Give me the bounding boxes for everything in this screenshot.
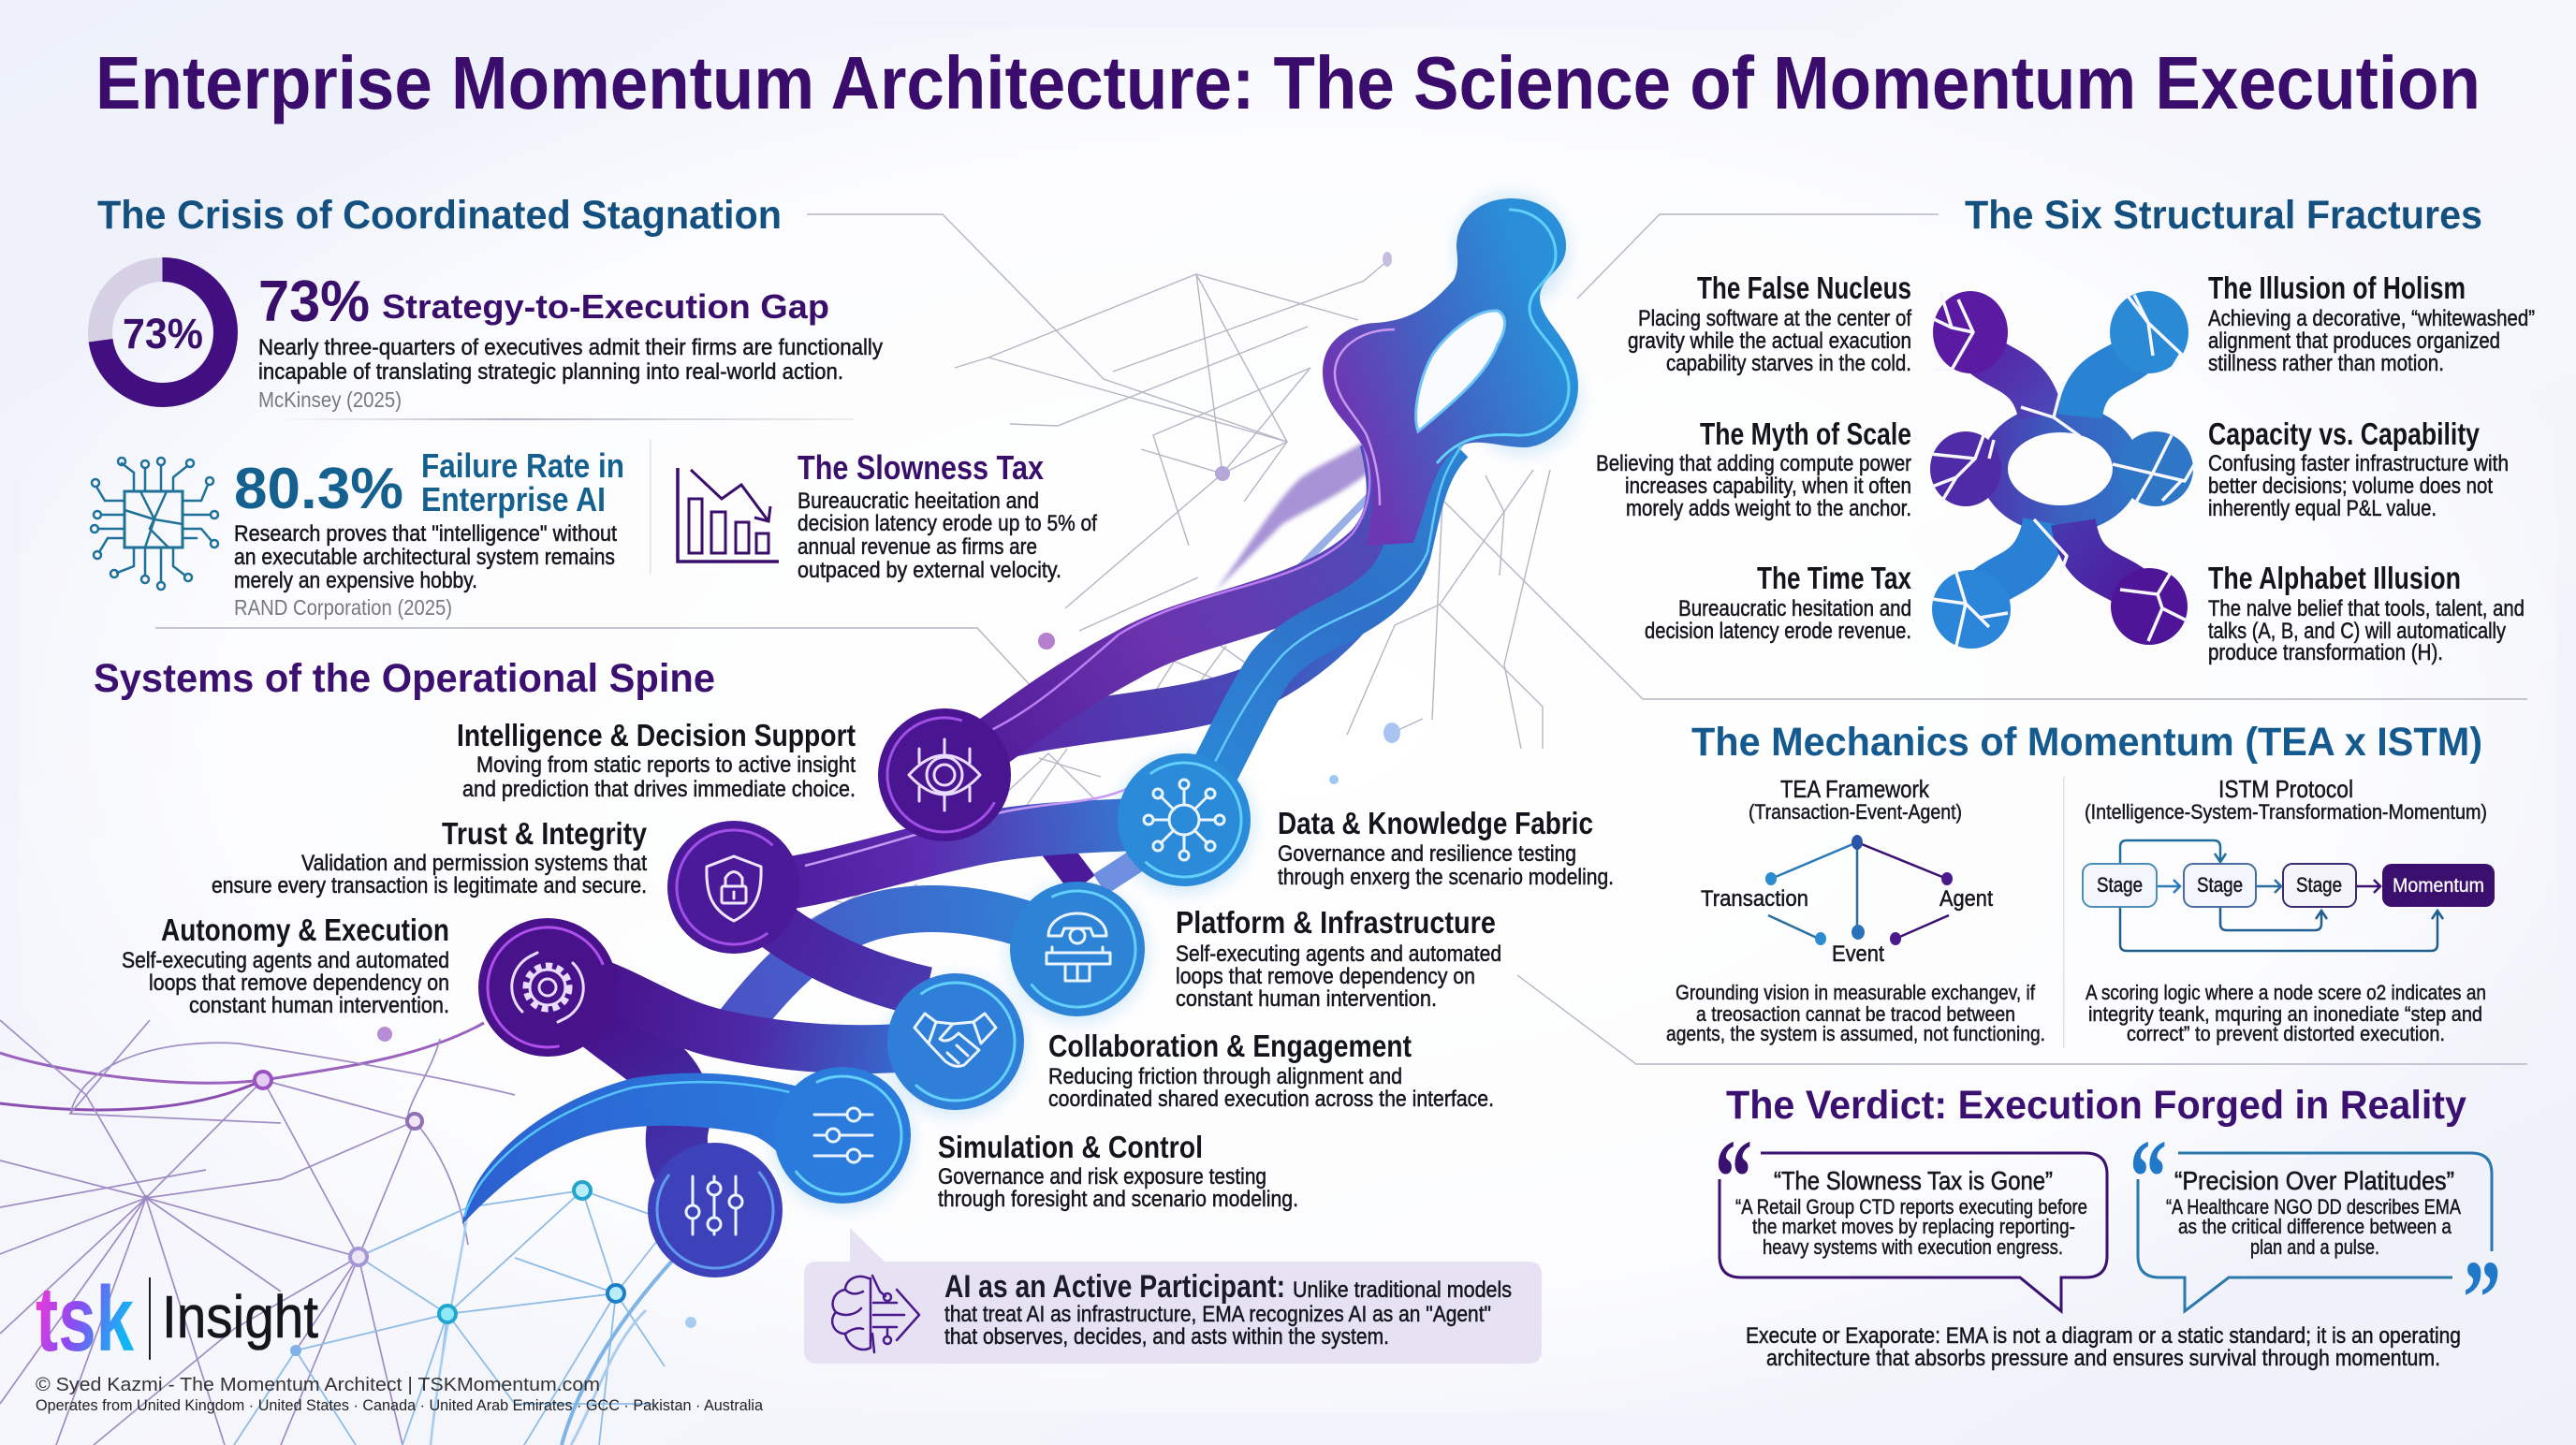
icon: cracked AI chip [91, 458, 218, 590]
fracture: capacity vs capability: better decisions; volume does not [2208, 474, 2493, 499]
label: platform [1176, 905, 1501, 1012]
heading: Systems of the Operational Spine [94, 656, 715, 701]
fracture: capacity vs capability: inherently equal P&L value. [2208, 496, 2437, 521]
label: collaboration: Reducing friction through alignment and [1048, 1064, 1402, 1089]
donut chart 73%: 73% [123, 310, 203, 358]
quote card: precision over platitudes [2130, 1117, 2501, 1357]
node: data [1105, 740, 1264, 899]
TEA triangle diagram: Event [1832, 941, 1884, 967]
icon: handshake [915, 1014, 996, 1066]
stat: 73% strategy gap: incapable of translating strategic planning into real-world action. [258, 359, 843, 385]
callout: AI as an active participant [804, 1228, 1542, 1364]
label: platform: Platform & Infrastructure [1176, 905, 1496, 940]
stat: 80.3% failure rate: an executable architectural system remains [234, 545, 615, 570]
ISTM flow diagram: Momentum [2393, 875, 2484, 897]
stat: 80.3% failure rate [234, 446, 624, 620]
fracture: myth of scale: Believing that adding compute power [1596, 451, 1911, 476]
heading: The Verdict: Execution Forged in Reality [1726, 1083, 2466, 1128]
label: trust: Validation and permission systems that [301, 851, 647, 876]
fracture: myth of scale: increases capability, when it often [1625, 474, 1911, 499]
slowness tax text [798, 448, 1097, 583]
TEA description: agents, the system is assumed, not functioning. [1666, 1022, 2045, 1045]
node: platform [1000, 871, 1155, 1027]
panel: six structural fractures [1596, 193, 2535, 665]
logo and credits: tsk [36, 1267, 134, 1370]
TEA triangle diagram: Agent [1939, 886, 1993, 912]
node: autonomy [477, 917, 618, 1058]
logo and credits: Operates from United Kingdom · United States · Canada · United Arab Emirates · GCC · Pakistan · Australia [36, 1397, 764, 1414]
ISTM flow diagram [2083, 840, 2495, 951]
strand: eye under platform [1030, 814, 1083, 884]
ISTM description: A scoring logic where a node scere o2 indicates an [2086, 981, 2486, 1004]
icon: gear [512, 953, 583, 1022]
slowness tax text: The Slowness Tax [798, 448, 1044, 487]
band: simulation [462, 1073, 806, 1224]
TEA description: a treosaction cannat be tracod between [1696, 1002, 2015, 1026]
donut chart 73% [100, 270, 226, 395]
label: platform: loops that remove dependency on [1176, 964, 1475, 989]
ISTM description [2086, 981, 2486, 1045]
callout text: that observes, decides, and asts within the system. [944, 1324, 1389, 1350]
label: autonomy: Autonomy & Execution [161, 912, 449, 947]
ISTM protocol title: ISTM Protocol [2218, 775, 2353, 803]
slowness tax text: decision latency erode up to 5% of [798, 511, 1097, 536]
label: autonomy: constant human intervention. [189, 993, 449, 1018]
closing statement: architecture that absorbs pressure and ensures survival through momentum. [1766, 1346, 2440, 1371]
fracture: false nucleus: The False Nucleus [1697, 270, 1911, 305]
heading: The Six Structural Fractures [1965, 193, 2482, 238]
strand: platform up [1100, 854, 1148, 884]
central spine [462, 195, 1579, 1292]
stat: 80.3% failure rate: Enterprise AI [421, 480, 606, 518]
label: trust: Trust & Integrity [442, 816, 648, 851]
band: trust to collaboration [734, 887, 927, 992]
stat: 73% strategy gap: Strategy-to-Execution Gap [382, 287, 829, 326]
stat: 80.3% failure rate: Research proves that "intelligence" without [234, 521, 617, 547]
TEA description [1666, 981, 2045, 1045]
fracture: illusion of holism [2208, 270, 2535, 376]
heading: The Crisis of Coordinated Stagnation [97, 193, 782, 238]
icon: data fabric [1144, 780, 1224, 860]
fracture: alphabet illusion: The nalve belief that tools, talent, and [2208, 596, 2525, 621]
node: vertical sliders [634, 1129, 797, 1292]
label: intelligence: Moving from static reports to active insight [476, 752, 856, 778]
fracture: capacity vs capability [2208, 416, 2509, 521]
TEA triangle diagram: Transaction [1701, 886, 1808, 912]
fracture: alphabet illusion: talks (A, B, and C) will automatically [2208, 619, 2506, 644]
icon: shield [707, 856, 761, 921]
stat: 80.3% failure rate: 80.3% [234, 457, 403, 521]
fracture: myth of scale: morely adds weight to the anchor. [1626, 496, 1911, 521]
strand highlight cyan [1208, 442, 1465, 777]
slowness tax text: outpaced by external velocity. [798, 558, 1061, 583]
decorative dots [377, 252, 1400, 1328]
fracture: alphabet illusion: produce transformation (H). [2208, 640, 2443, 665]
label: platform: Self-executing agents and automated [1176, 941, 1501, 967]
TEA description: Grounding vision in measurable exchangev, if [1676, 981, 2036, 1004]
fracture: time tax: The Time Tax [1757, 561, 1912, 595]
fracture: time tax: Bureaucratic hesitation and [1678, 596, 1911, 621]
fracture: false nucleus: gravity while the actual exacution [1628, 328, 1911, 354]
logo and credits [36, 1267, 764, 1414]
label: data: through enxerg the scenario modeling. [1278, 865, 1614, 890]
slowness tax text: Bureaucratic heeitation and [798, 489, 1039, 514]
quote card: precision over platitudes: “Precision Over Platitudes” [2174, 1166, 2454, 1195]
quote card: slowness tax: heavy systems with execution engress. [1763, 1235, 2063, 1259]
head: merged lobes [1323, 198, 1578, 546]
fracture: capacity vs capability: Capacity vs. Capability [2208, 416, 2481, 451]
panel: crisis of coordinated stagnation [91, 193, 1097, 620]
quote card: precision over platitudes: plan and a pulse. [2250, 1235, 2379, 1259]
panel: systems of the operational spine [94, 656, 1614, 1212]
label: collaboration: coordinated shared execution across the interface. [1048, 1087, 1494, 1112]
fracture diagram [1930, 291, 2195, 649]
TEA framework title: TEA Framework [1780, 775, 1930, 803]
label: simulation [938, 1130, 1298, 1212]
node: simulation [764, 1057, 921, 1214]
stat: 73% strategy gap [258, 270, 883, 412]
quote card: precision over platitudes: “A Healthcare NGO DD describes EMA [2166, 1195, 2461, 1219]
logo and credits: Insight [162, 1283, 318, 1350]
stat: 80.3% failure rate: merely an expensive hobby. [234, 568, 477, 593]
fracture: alphabet illusion: The Alphabet Illusion [2208, 561, 2461, 595]
TEA framework title: (Transaction-Event-Agent) [1749, 800, 1962, 824]
icon: declining chart [678, 468, 779, 562]
callout text: Unlike traditional models [1293, 1277, 1512, 1303]
ISTM flow diagram: Stage [2296, 873, 2342, 897]
label: autonomy [122, 912, 449, 1018]
strand: data to head [1184, 440, 1451, 820]
fracture: illusion of holism: alignment that produces organized [2208, 328, 2500, 354]
ISTM flow diagram: Stage [2197, 873, 2243, 897]
fracture: illusion of holism: stillness rather than motion. [2208, 351, 2444, 376]
label: autonomy: loops that remove dependency on [149, 971, 449, 996]
label: collaboration [1048, 1029, 1494, 1112]
icon: horizontal sliders [814, 1108, 872, 1162]
fracture: time tax: decision latency erode revenue. [1645, 619, 1911, 644]
label: trust: ensure every transaction is legitimate and secure. [212, 873, 647, 898]
TEA triangle diagram [1701, 835, 1993, 967]
label: intelligence: Intelligence & Decision Support [457, 718, 856, 752]
quote card: slowness tax: “The Slowness Tax is Gone” [1774, 1166, 2053, 1195]
quote card: slowness tax: the market moves by replacing reporting- [1752, 1215, 2075, 1238]
quote card: slowness tax [1715, 1117, 2107, 1311]
stat: 80.3% failure rate: RAND Corporation (2025) [234, 595, 452, 620]
glow under spine [773, 195, 1579, 1209]
fracture: false nucleus [1628, 270, 1911, 376]
strand: eye lower [964, 552, 1395, 749]
label: simulation: Governance and risk exposure testing [938, 1164, 1266, 1190]
callout text [944, 1269, 1512, 1350]
label: data: Data & Knowledge Fabric [1278, 806, 1593, 840]
strand: eye upper [944, 440, 1393, 775]
label: platform: constant human intervention. [1176, 986, 1437, 1012]
callout text: that treat AI as infrastructure, EMA recognizes AI as an "Agent" [944, 1302, 1491, 1327]
band: trust to data [734, 820, 1184, 887]
callout text: AI as an Active Participant: [944, 1269, 1285, 1305]
quote card: precision over platitudes: as the critical difference between a [2178, 1215, 2452, 1238]
logo and credits: © Syed Kazmi - The Momentum Architect | TSKMomentum.com [36, 1375, 600, 1395]
quote card: slowness tax: “ [1715, 1117, 1752, 1236]
closing statement [1746, 1323, 2461, 1371]
stat: 73% strategy gap: McKinsey (2025) [258, 387, 402, 412]
icon: vertical sliders [686, 1176, 742, 1234]
ISTM protocol title: (Intelligence-System-Transformation-Momentum) [2085, 800, 2487, 824]
connector lines and network behind the centre [155, 214, 2527, 1064]
icon: platform [1046, 913, 1110, 981]
icon: brain with arrow [832, 1276, 919, 1352]
label: simulation: Simulation & Control [938, 1130, 1203, 1164]
fracture: illusion of holism: The Illusion of Holism [2208, 270, 2466, 305]
fracture: false nucleus: capability starves in the cold. [1666, 351, 1911, 376]
quote card: slowness tax: “A Retail Group CTD reports executing before [1735, 1195, 2087, 1219]
label: collaboration: Collaboration & Engagement [1048, 1029, 1412, 1063]
ISTM flow diagram: Stage [2097, 873, 2143, 897]
label: intelligence: and prediction that drives immediate choice. [462, 777, 856, 802]
node: collaboration [873, 959, 1038, 1124]
label: simulation: through foresight and scenario modeling. [938, 1187, 1298, 1212]
band: platform [721, 909, 1077, 1048]
strand highlight purple [964, 440, 1369, 742]
TEA framework title [1749, 775, 1962, 824]
ISTM description: integrity teank, mquring an inonediate “step and [2088, 1002, 2482, 1026]
heading: The Mechanics of Momentum (TEA x ISTM) [1691, 720, 2482, 765]
band: autonomy to collaboration [548, 973, 956, 1049]
stat: 80.3% failure rate: Failure Rate in [421, 446, 624, 485]
node: eye [867, 697, 1022, 853]
label: intelligence [457, 718, 856, 802]
stat: 73% strategy gap: 73% [258, 270, 370, 334]
fracture: false nucleus: Placing software at the center of [1638, 306, 1911, 331]
label: data [1278, 806, 1614, 890]
quote card: precision over platitudes: ” [2463, 1238, 2501, 1357]
panel: the verdict [1715, 1083, 2501, 1371]
stat: 73% strategy gap: Nearly three-quarters of executives admit their firms are functionally [258, 335, 883, 360]
ISTM protocol title [2085, 775, 2487, 824]
label: data: Governance and resilience testing [1278, 841, 1576, 867]
closing statement: Execute or Exaporate: EMA is not a diagram or a static standard; it is an operating [1746, 1323, 2461, 1349]
label: trust [212, 816, 648, 898]
network: bottom left [0, 1020, 683, 1445]
node: trust [654, 808, 813, 967]
panel: mechanics of momentum [1666, 720, 2495, 1048]
fracture: myth of scale [1596, 416, 1911, 521]
fracture: myth of scale: The Myth of Scale [1700, 416, 1911, 451]
ISTM description: correct” to prevent distorted execution. [2127, 1022, 2445, 1045]
label: autonomy: Self-executing agents and automated [122, 948, 449, 973]
fracture: capacity vs capability: Confusing faster infrastructure with [2208, 451, 2509, 476]
fracture: alphabet illusion [2208, 561, 2525, 665]
quote card: precision over platitudes: “ [2130, 1117, 2167, 1236]
icon: eye [909, 739, 980, 810]
fracture: time tax [1645, 561, 1912, 644]
band: autonomy to sliders [599, 1020, 715, 1212]
slowness tax text: annual revenue as firms are [798, 534, 1037, 560]
